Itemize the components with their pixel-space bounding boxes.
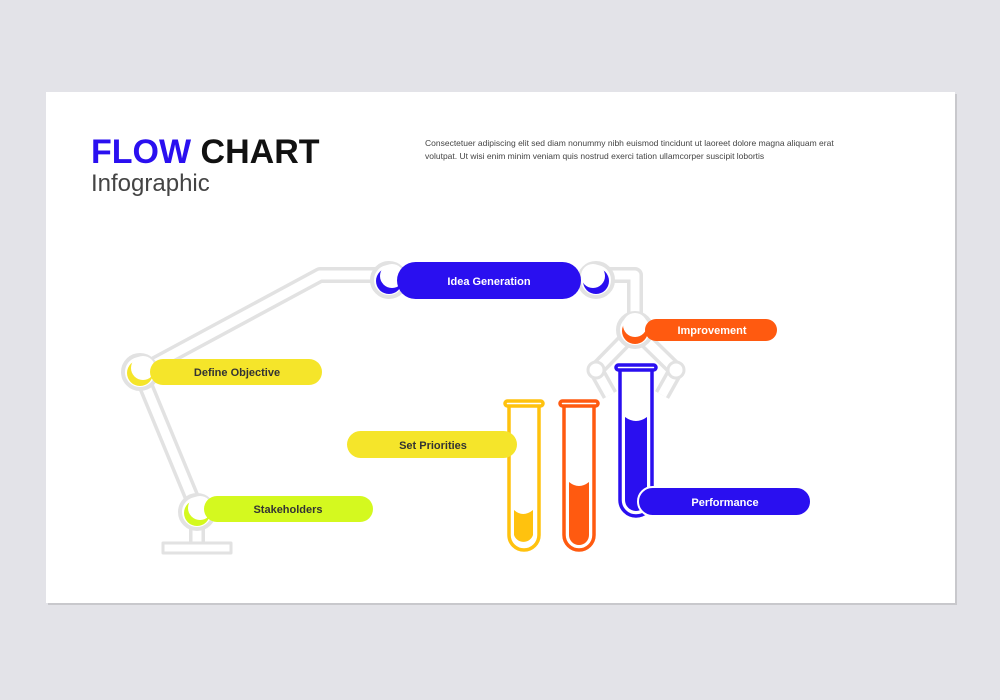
description text: Consectetuer adipiscing elit sed diam nonummy nibh euismod tincidunt ut laoreet dolore magna aliquam erat xyxy=(425,138,834,148)
pill: Define Objective xyxy=(150,359,322,385)
title: FLOW CHART xyxy=(91,133,320,171)
tube: orange xyxy=(560,401,598,550)
pill: Stakeholders xyxy=(204,496,373,522)
pill: Improvement xyxy=(645,319,777,341)
pill: Performance xyxy=(638,487,811,516)
description text xyxy=(425,138,834,161)
subtitle: Infographic xyxy=(91,170,210,197)
tube: yellow xyxy=(505,401,543,550)
pill: Set Priorities xyxy=(347,431,517,458)
crescents xyxy=(127,264,648,526)
pill: Performance: Performance xyxy=(691,497,759,509)
robot arm structure xyxy=(140,275,684,553)
pill: Idea Generation xyxy=(397,262,581,299)
joints xyxy=(123,263,652,529)
card xyxy=(46,92,957,605)
pill: Idea Generation: Idea Generation xyxy=(447,276,531,288)
pill: Set Priorities: Set Priorities xyxy=(399,440,467,452)
pill: Improvement: Improvement xyxy=(677,325,747,337)
pill: Define Objective: Define Objective xyxy=(194,367,280,379)
tube: blue xyxy=(616,365,656,516)
pill: Stakeholders: Stakeholders xyxy=(253,504,323,516)
description text: volutpat. Ut wisi enim minim veniam quis nostrud exerci tation ullamcorper suscipit lobortis xyxy=(425,151,764,161)
